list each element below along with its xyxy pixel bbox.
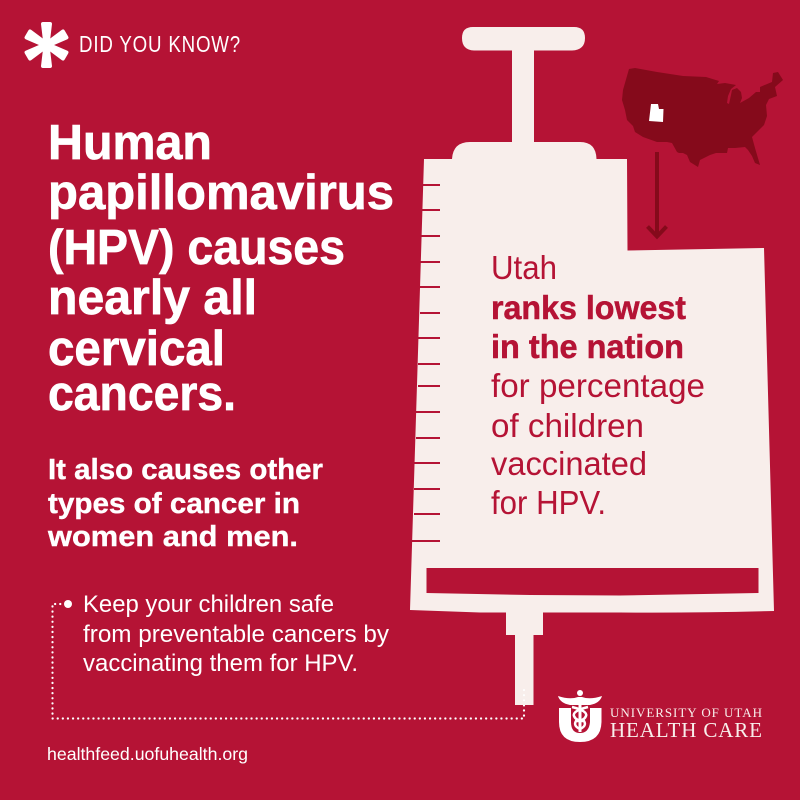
text block: Utah ranks lowest: of children: [491, 407, 644, 444]
heading: did you know: DID YOU KNOW?: [79, 31, 241, 57]
text block: keep your children safe: [83, 591, 389, 677]
title: Human: [48, 116, 212, 170]
subheading: other cancers: women and men.: [47, 521, 298, 553]
website url: healthfeed.uofuhealth.org: [47, 744, 248, 764]
subheading: other cancers: It also causes other: [48, 454, 323, 486]
title: (HPV) causes: [48, 221, 345, 275]
syringe shaped like Utah: [410, 27, 774, 705]
text block: Utah ranks lowest: for percentage: [491, 367, 705, 404]
title: cancers.: [48, 367, 236, 421]
logo: University of Utah Health Care: UNIVERSITY OF UTAH: [610, 705, 762, 720]
logo: University of Utah Health Care: HEALTH CARE: [610, 718, 762, 742]
arrow: map to Utah: [648, 152, 666, 237]
subheading: other cancers: types of cancer in: [48, 488, 300, 520]
text block: Utah ranks lowest: for HPV.: [491, 484, 606, 521]
text block: Utah ranks lowest: ranks lowest: [491, 289, 686, 326]
logo: University of Utah Health Care: [558, 690, 762, 742]
text block: Utah ranks lowest: Utah: [491, 249, 557, 286]
title: nearly all: [48, 271, 257, 325]
syringe measure ticks: [412, 185, 440, 541]
callout: dotted connector: [52, 600, 524, 718]
text block: Utah ranks lowest: vaccinated: [491, 445, 647, 482]
map: United States with Utah highlighted: [622, 68, 783, 167]
text block: keep your children safe: vaccinating them for HPV.: [83, 650, 358, 677]
text block: keep your children safe: from preventable cancers by: [83, 621, 389, 648]
text block: keep your children safe: Keep your children safe: [83, 591, 334, 618]
text block: Utah ranks lowest: [491, 249, 705, 521]
dots over nozzle tip: [523, 690, 525, 705]
icon: asterisk: [24, 22, 69, 68]
title: cervical: [48, 322, 225, 376]
title: papillomavirus: [48, 166, 394, 220]
subheading: other cancers: [47, 454, 323, 553]
text block: Utah ranks lowest: in the nation: [491, 328, 684, 365]
title: [48, 116, 394, 421]
